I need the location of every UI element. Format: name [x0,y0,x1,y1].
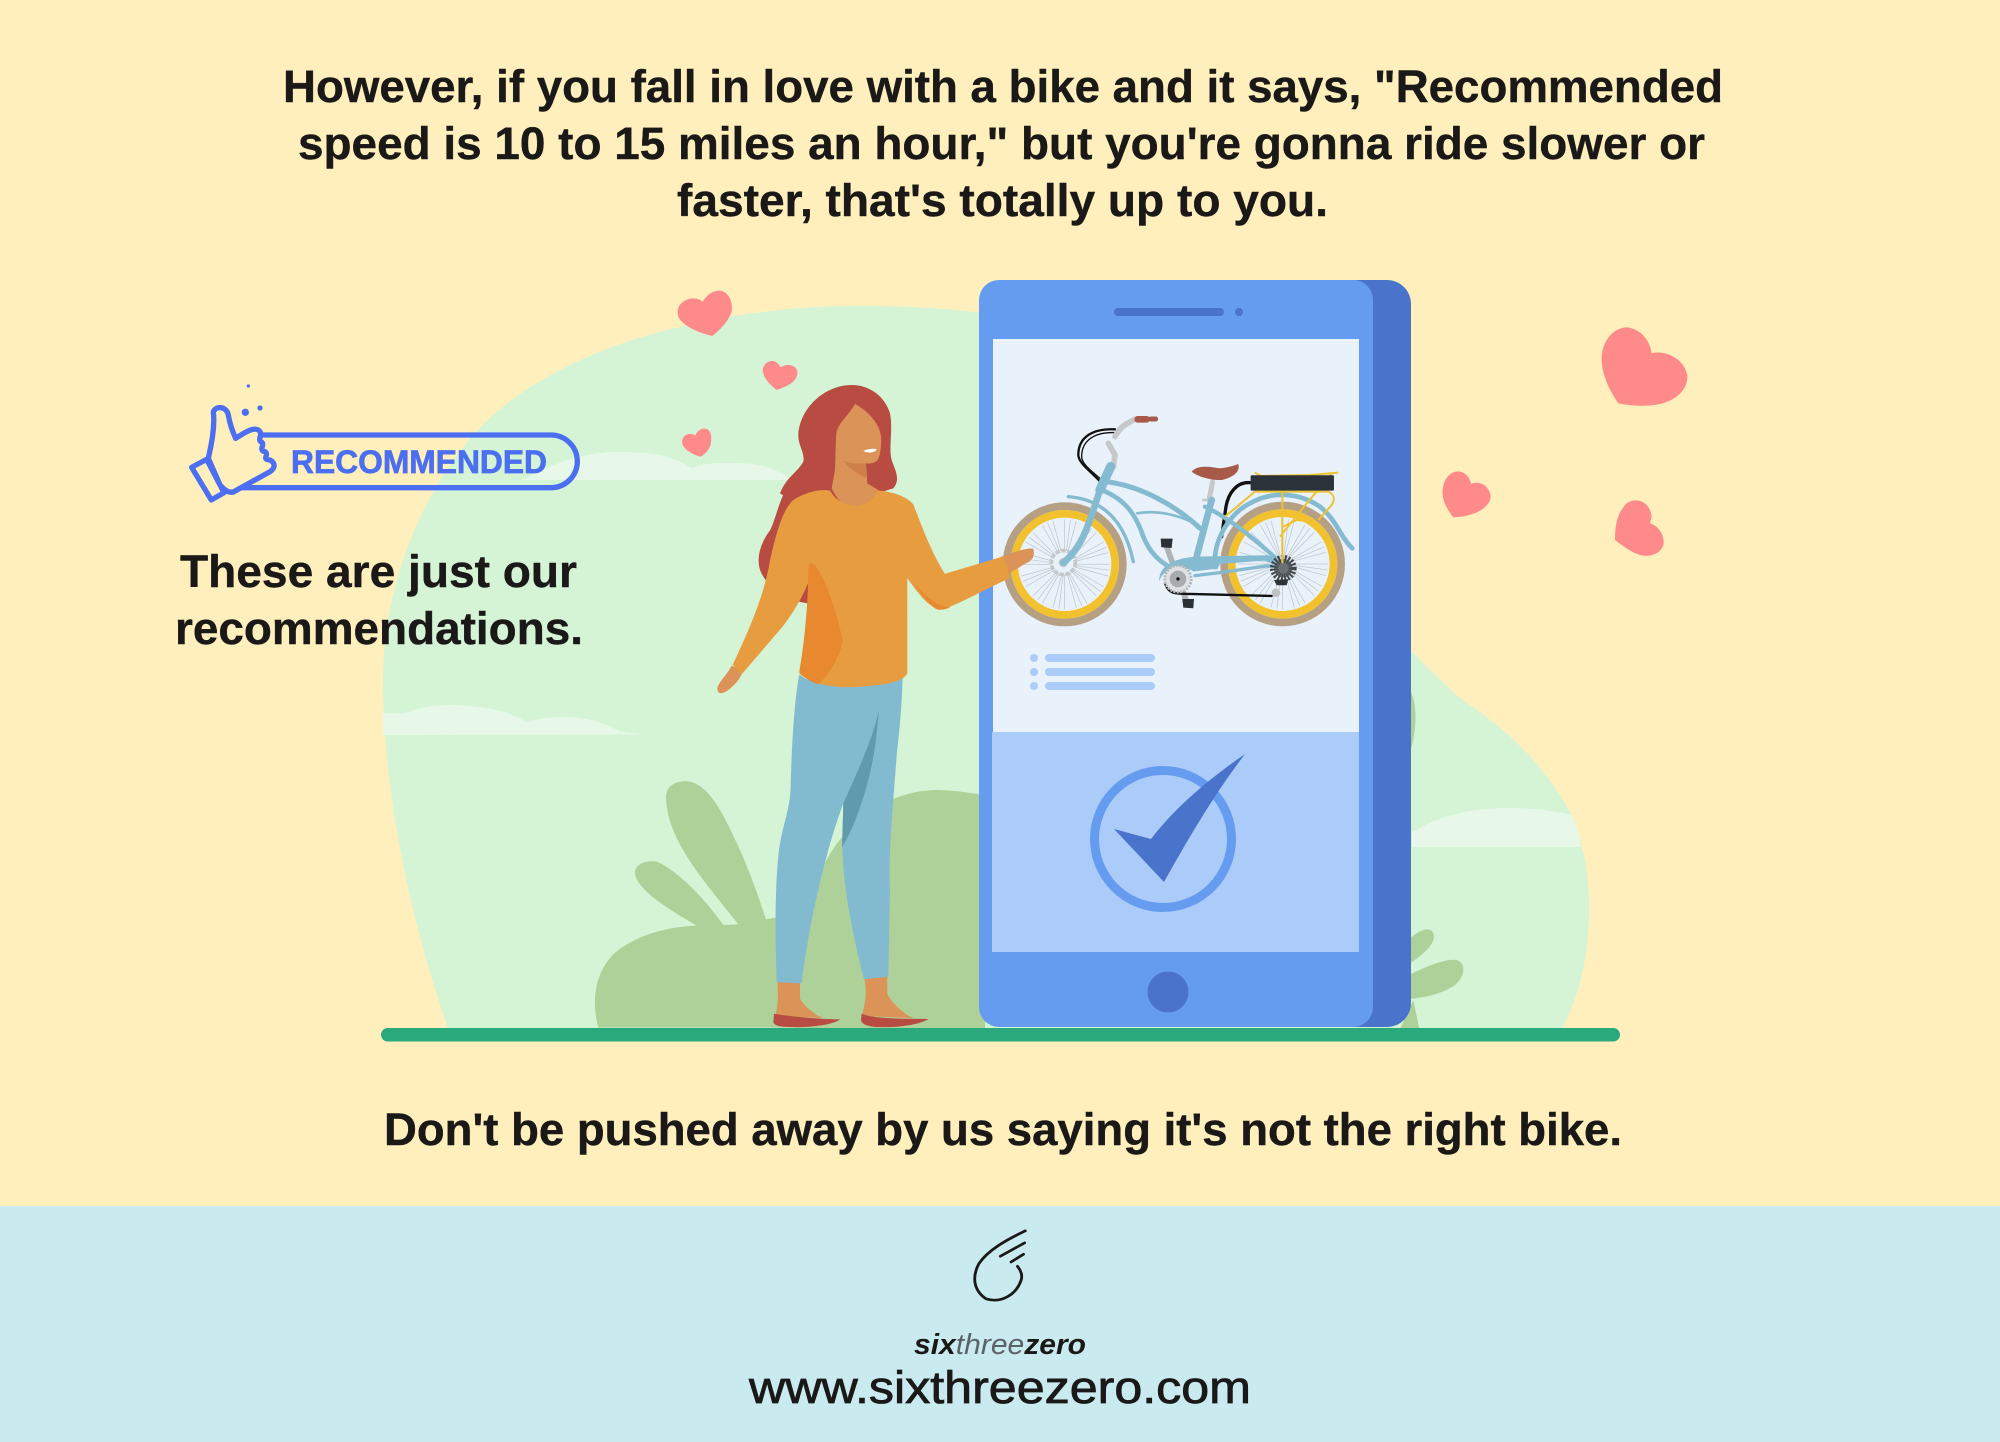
background bushes and leaves [595,690,1463,1029]
text: these are just our recommendations [175,546,583,654]
text: don't be pushed away: Don't be pushed away by us saying it's not the right bike. [384,1104,1622,1155]
background: pale green blob with clouds [383,306,1589,1028]
shoes [773,1014,840,1027]
brand name: sixthreezero [914,1329,1086,1361]
pannier rack [1225,473,1338,563]
chain stay [1159,555,1284,582]
spec list [1030,654,1155,690]
ground line [381,1028,1620,1042]
woman illustration [717,385,1034,1027]
handlebars and front frame [1063,419,1200,568]
website url: www.sixthreezero.com [748,1362,1251,1413]
hearts on the right [1443,327,1687,556]
text: these are just our recommendations: recommendations. [175,603,583,654]
battery [1251,475,1334,491]
text: these are just our recommendations: These are just our [180,546,577,597]
face and neck [832,404,881,508]
icon: check mark in circle [1094,754,1245,908]
cassette [1274,559,1293,578]
sweater [733,490,1010,687]
heading: top paragraph: faster, that's totally up to you. [677,175,1328,226]
legs and feet [775,979,823,1018]
heading: top paragraph: speed is 10 to 15 miles an hour," but you're gonna ride slower or [298,118,1705,169]
hair [759,385,897,604]
rear wheel [1224,505,1341,622]
hearts on the left [678,291,797,457]
trousers [776,674,903,983]
hands [1000,548,1034,574]
front wheel [1006,506,1123,622]
heading: top paragraph: However, if you fall in love with a bike and it says, "Recommended [283,61,1723,112]
saddle [1192,464,1239,480]
icon: thumb up [208,408,274,492]
heading: top paragraph [283,61,1723,226]
bike illustration [1006,419,1352,622]
crank and pedals [1161,539,1288,608]
rear frame, rack and drivetrain [1159,464,1352,608]
badge label: RECOMMENDED [291,444,547,480]
phone [979,280,1411,1027]
footer band [0,1206,2000,1442]
logo mark [975,1231,1025,1300]
badge: thumbs up recommended [192,384,577,500]
